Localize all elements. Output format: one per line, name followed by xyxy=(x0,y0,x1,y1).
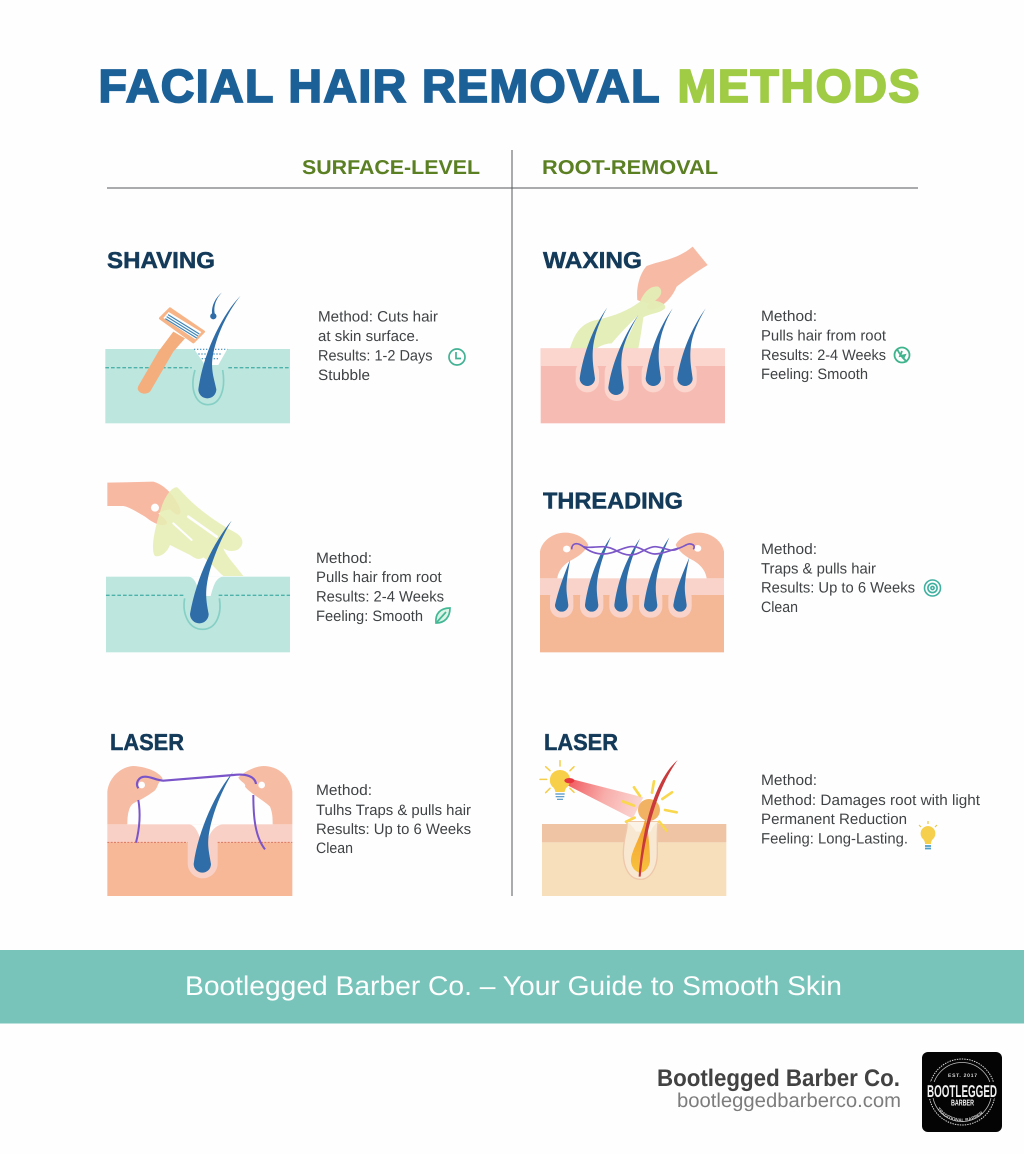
text block: Pulls hair from root xyxy=(761,328,887,344)
text block: Tulhs Traps & pulls hair xyxy=(316,802,471,819)
illustration: hands with twisted thread on skin xyxy=(540,533,724,652)
icon: light bulb xyxy=(919,821,937,848)
panel: waxing surface xyxy=(106,482,450,652)
text block xyxy=(761,308,887,383)
icon: crossed leaf xyxy=(894,348,910,362)
text block: Feeling: Long-Lasting. xyxy=(761,830,908,848)
text block: Results: Up to 6 Weeks xyxy=(316,821,471,838)
text block: Traps & pulls hair xyxy=(761,560,876,578)
icon: leaf xyxy=(436,608,450,623)
panel: laser left xyxy=(107,729,471,896)
text block: Clean xyxy=(316,840,353,857)
text block: at skin surface. xyxy=(318,328,419,345)
heading: waxing: WAXING xyxy=(543,247,642,273)
panel: shaving xyxy=(105,247,465,423)
title: FACIAL HAIR REMOVAL xyxy=(98,60,660,112)
illustration: hand pulling wax from skin xyxy=(541,247,725,423)
banner xyxy=(0,950,1024,1024)
illustration: hand lifting wax strip xyxy=(106,482,290,652)
text block: Results: 2-4 Weeks xyxy=(316,588,444,606)
text block: Method: Damages root with light xyxy=(761,792,981,809)
text block: Method: xyxy=(316,782,372,799)
logo: TRADITIONAL BARBER xyxy=(938,1107,984,1122)
text block: Clean xyxy=(761,599,798,616)
illustration: hands with thread and single hair xyxy=(107,766,292,896)
text block: Results: Up to 6 Weeks xyxy=(761,580,915,596)
footer url: bootleggedbarberco.com xyxy=(677,1090,901,1112)
column heading: root-removal: ROOT-REMOVAL xyxy=(542,157,718,179)
title xyxy=(98,60,920,112)
text block: Method: Cuts hair xyxy=(318,308,438,326)
illustration: light beam on hair root xyxy=(540,760,726,896)
heading: threading: THREADING xyxy=(543,488,683,514)
text block xyxy=(761,541,915,616)
panel: laser right xyxy=(540,729,981,896)
logo xyxy=(922,1052,1002,1132)
text block: Method: xyxy=(316,550,372,567)
text block: Feeling: Smooth xyxy=(316,608,423,625)
text block: Method: xyxy=(761,308,817,325)
text block xyxy=(316,550,444,625)
heading: laser: LASER xyxy=(110,729,184,755)
text block: Method: xyxy=(761,772,817,789)
heading: shaving: SHAVING xyxy=(107,247,215,273)
title: METHODS xyxy=(678,60,920,112)
column heading: surface-level: SURFACE-LEVEL xyxy=(302,157,480,179)
logo: EST. 2017 xyxy=(948,1073,977,1079)
text block xyxy=(318,308,438,384)
text block: Method: xyxy=(761,541,817,558)
banner text: Bootlegged Barber Co. – Your Guide to Smooth Skin xyxy=(185,971,842,1001)
panel: waxing xyxy=(541,247,910,423)
text block xyxy=(316,782,471,857)
text block xyxy=(761,772,981,848)
text block: Results: 2-4 Weeks xyxy=(761,347,886,364)
text block: Permanent Reduction xyxy=(761,811,907,828)
text block: Feeling: Smooth xyxy=(761,366,868,383)
icon: target xyxy=(924,580,940,596)
illustration: razor and cut hair on skin xyxy=(105,292,290,423)
footer brand name: Bootlegged Barber Co. xyxy=(657,1065,900,1092)
logo: BARBER xyxy=(951,1098,974,1108)
icon: clock xyxy=(449,349,465,365)
panel: threading xyxy=(540,488,940,652)
text block: Pulls hair from root xyxy=(316,569,443,586)
text block: Results: 1-2 Days xyxy=(318,348,432,364)
text block: Stubble xyxy=(318,367,370,384)
heading: laser: LASER xyxy=(544,729,618,755)
